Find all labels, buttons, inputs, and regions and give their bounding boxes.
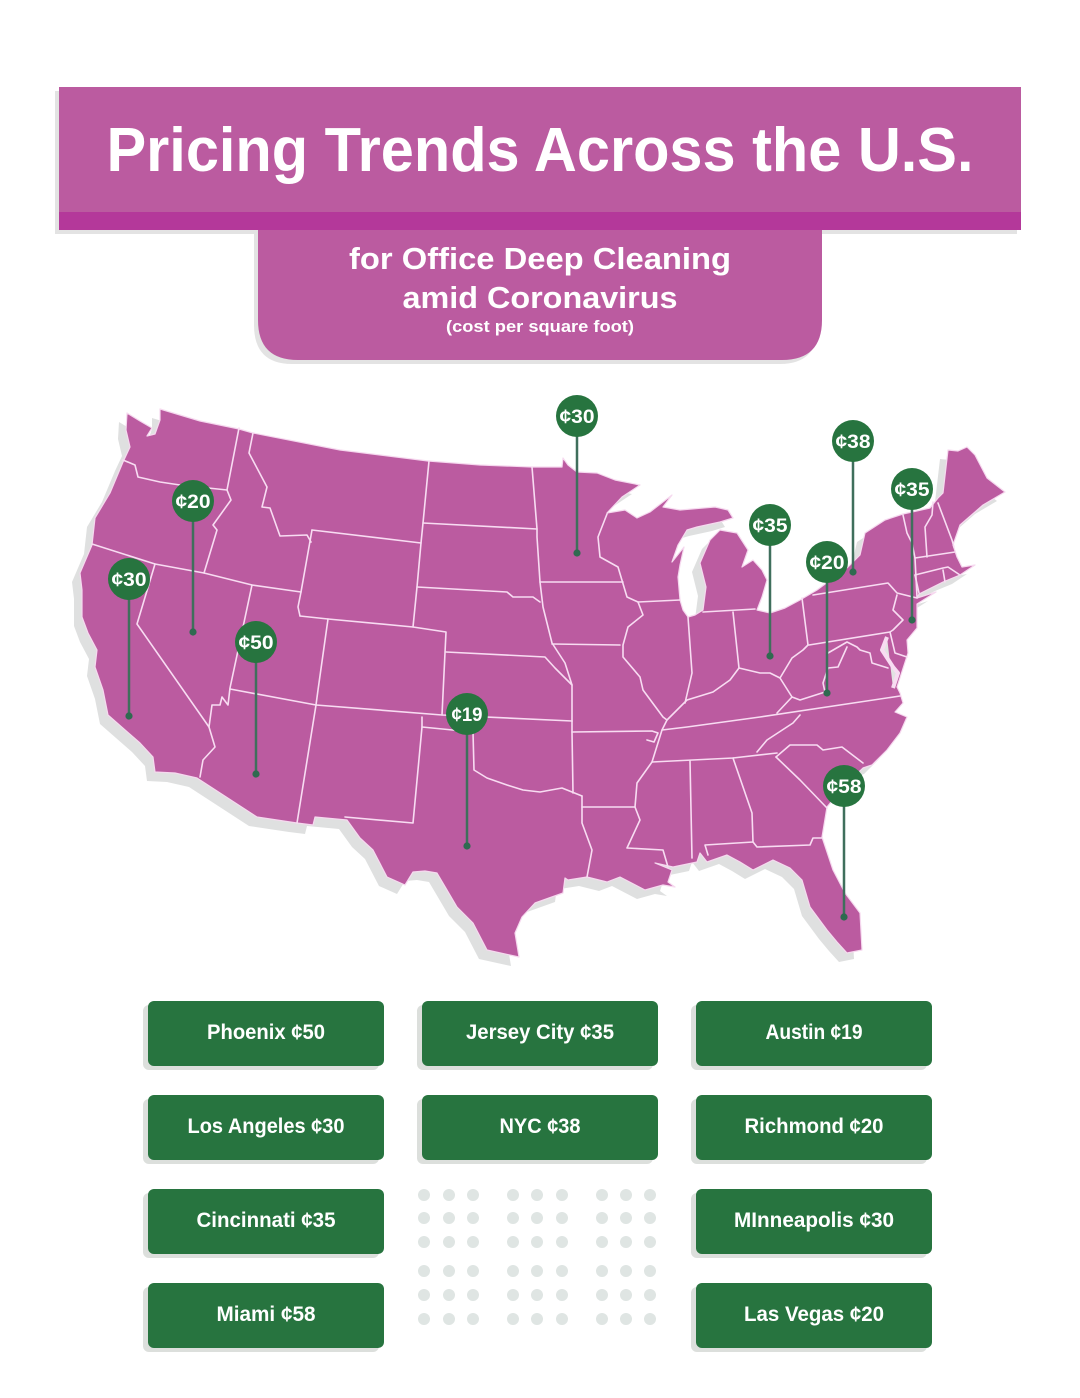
button: Las Vegas: Las Vegas ¢20 [744, 1303, 884, 1326]
pin: Los Angeles: ¢30 [112, 570, 146, 591]
pin: Minneapolis: ¢30 [560, 407, 594, 428]
button: Los Angeles [143, 1095, 384, 1164]
map: United States [72, 409, 1005, 966]
pin: Minneapolis [556, 395, 598, 557]
pin: Phoenix [235, 621, 277, 778]
subtitle panel: (cost per square foot) [446, 317, 634, 336]
pin: NYC: ¢38 [836, 432, 870, 453]
button: NYC [417, 1095, 658, 1164]
button: Miami [143, 1283, 384, 1352]
button: Minneapolis [691, 1189, 932, 1258]
button: Cincinnati [143, 1189, 384, 1258]
pin: Cincinnati [749, 504, 791, 660]
pin: Las Vegas: ¢20 [176, 492, 210, 513]
button: Richmond [691, 1095, 932, 1164]
pin: Austin: ¢19 [452, 705, 482, 726]
pin: Richmond [806, 541, 848, 697]
pin: NYC [832, 420, 874, 576]
button: Austin: Austin ¢19 [766, 1021, 862, 1044]
button: NYC: NYC ¢38 [500, 1115, 581, 1138]
pin: Jersey City: ¢35 [894, 480, 930, 501]
subtitle panel: amid Coronavirus [402, 280, 678, 315]
decorative dot grid [418, 1189, 656, 1325]
pin: Cincinnati: ¢35 [752, 516, 788, 537]
pin: Phoenix: ¢50 [238, 633, 274, 654]
button: Miami: Miami ¢58 [216, 1303, 316, 1326]
pin: Miami: ¢58 [826, 777, 862, 798]
pin: Austin [446, 693, 488, 850]
button: Richmond: Richmond ¢20 [744, 1115, 884, 1138]
pin: Jersey City [891, 468, 933, 624]
title: Pricing Trends Across the U.S. [106, 116, 974, 185]
pin: Miami [823, 765, 865, 921]
pin: Los Angeles [108, 558, 150, 720]
button: Minneapolis: MInneapolis ¢30 [734, 1209, 894, 1232]
pin: Las Vegas [172, 480, 214, 636]
button: Jersey City [417, 1001, 658, 1070]
pin: Richmond: ¢20 [810, 553, 844, 574]
button: Phoenix: Phoenix ¢50 [207, 1021, 325, 1044]
subtitle panel [254, 230, 822, 364]
button: Los Angeles: Los Angeles ¢30 [188, 1115, 344, 1138]
button: Las Vegas [691, 1283, 932, 1352]
button: Phoenix [143, 1001, 384, 1070]
button: Jersey City: Jersey City ¢35 [466, 1021, 614, 1044]
button: Cincinnati: Cincinnati ¢35 [196, 1209, 336, 1232]
title banner [55, 87, 1021, 234]
button: Austin [691, 1001, 932, 1070]
subtitle panel: for Office Deep Cleaning [349, 241, 731, 276]
